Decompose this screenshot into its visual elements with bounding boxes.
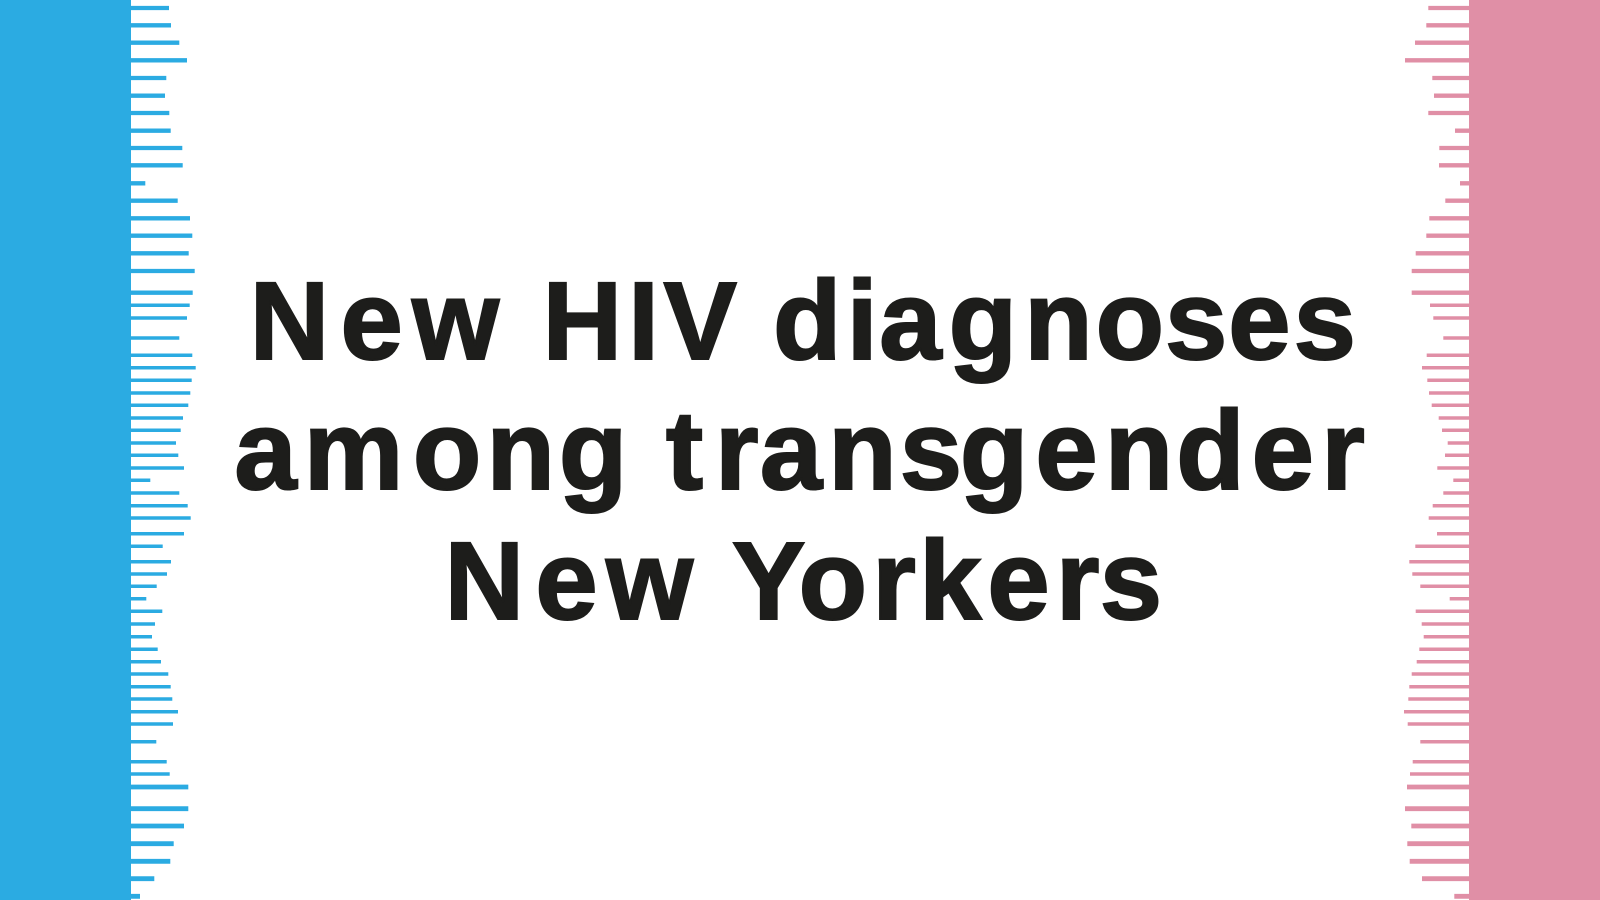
title: diagnoses [773,258,1356,383]
panel: blue band with ruler ticks [0,0,196,900]
title: N [445,520,524,643]
title: among [234,388,627,513]
title: ew [340,258,500,383]
title [234,258,1365,643]
title: Y [732,520,805,643]
title: orkers [799,518,1162,643]
title: N [250,260,329,383]
title: HIV [543,260,737,383]
title: ew [535,518,694,643]
panel: pink band with ruler ticks [1404,0,1600,900]
title: transgender [666,388,1365,513]
